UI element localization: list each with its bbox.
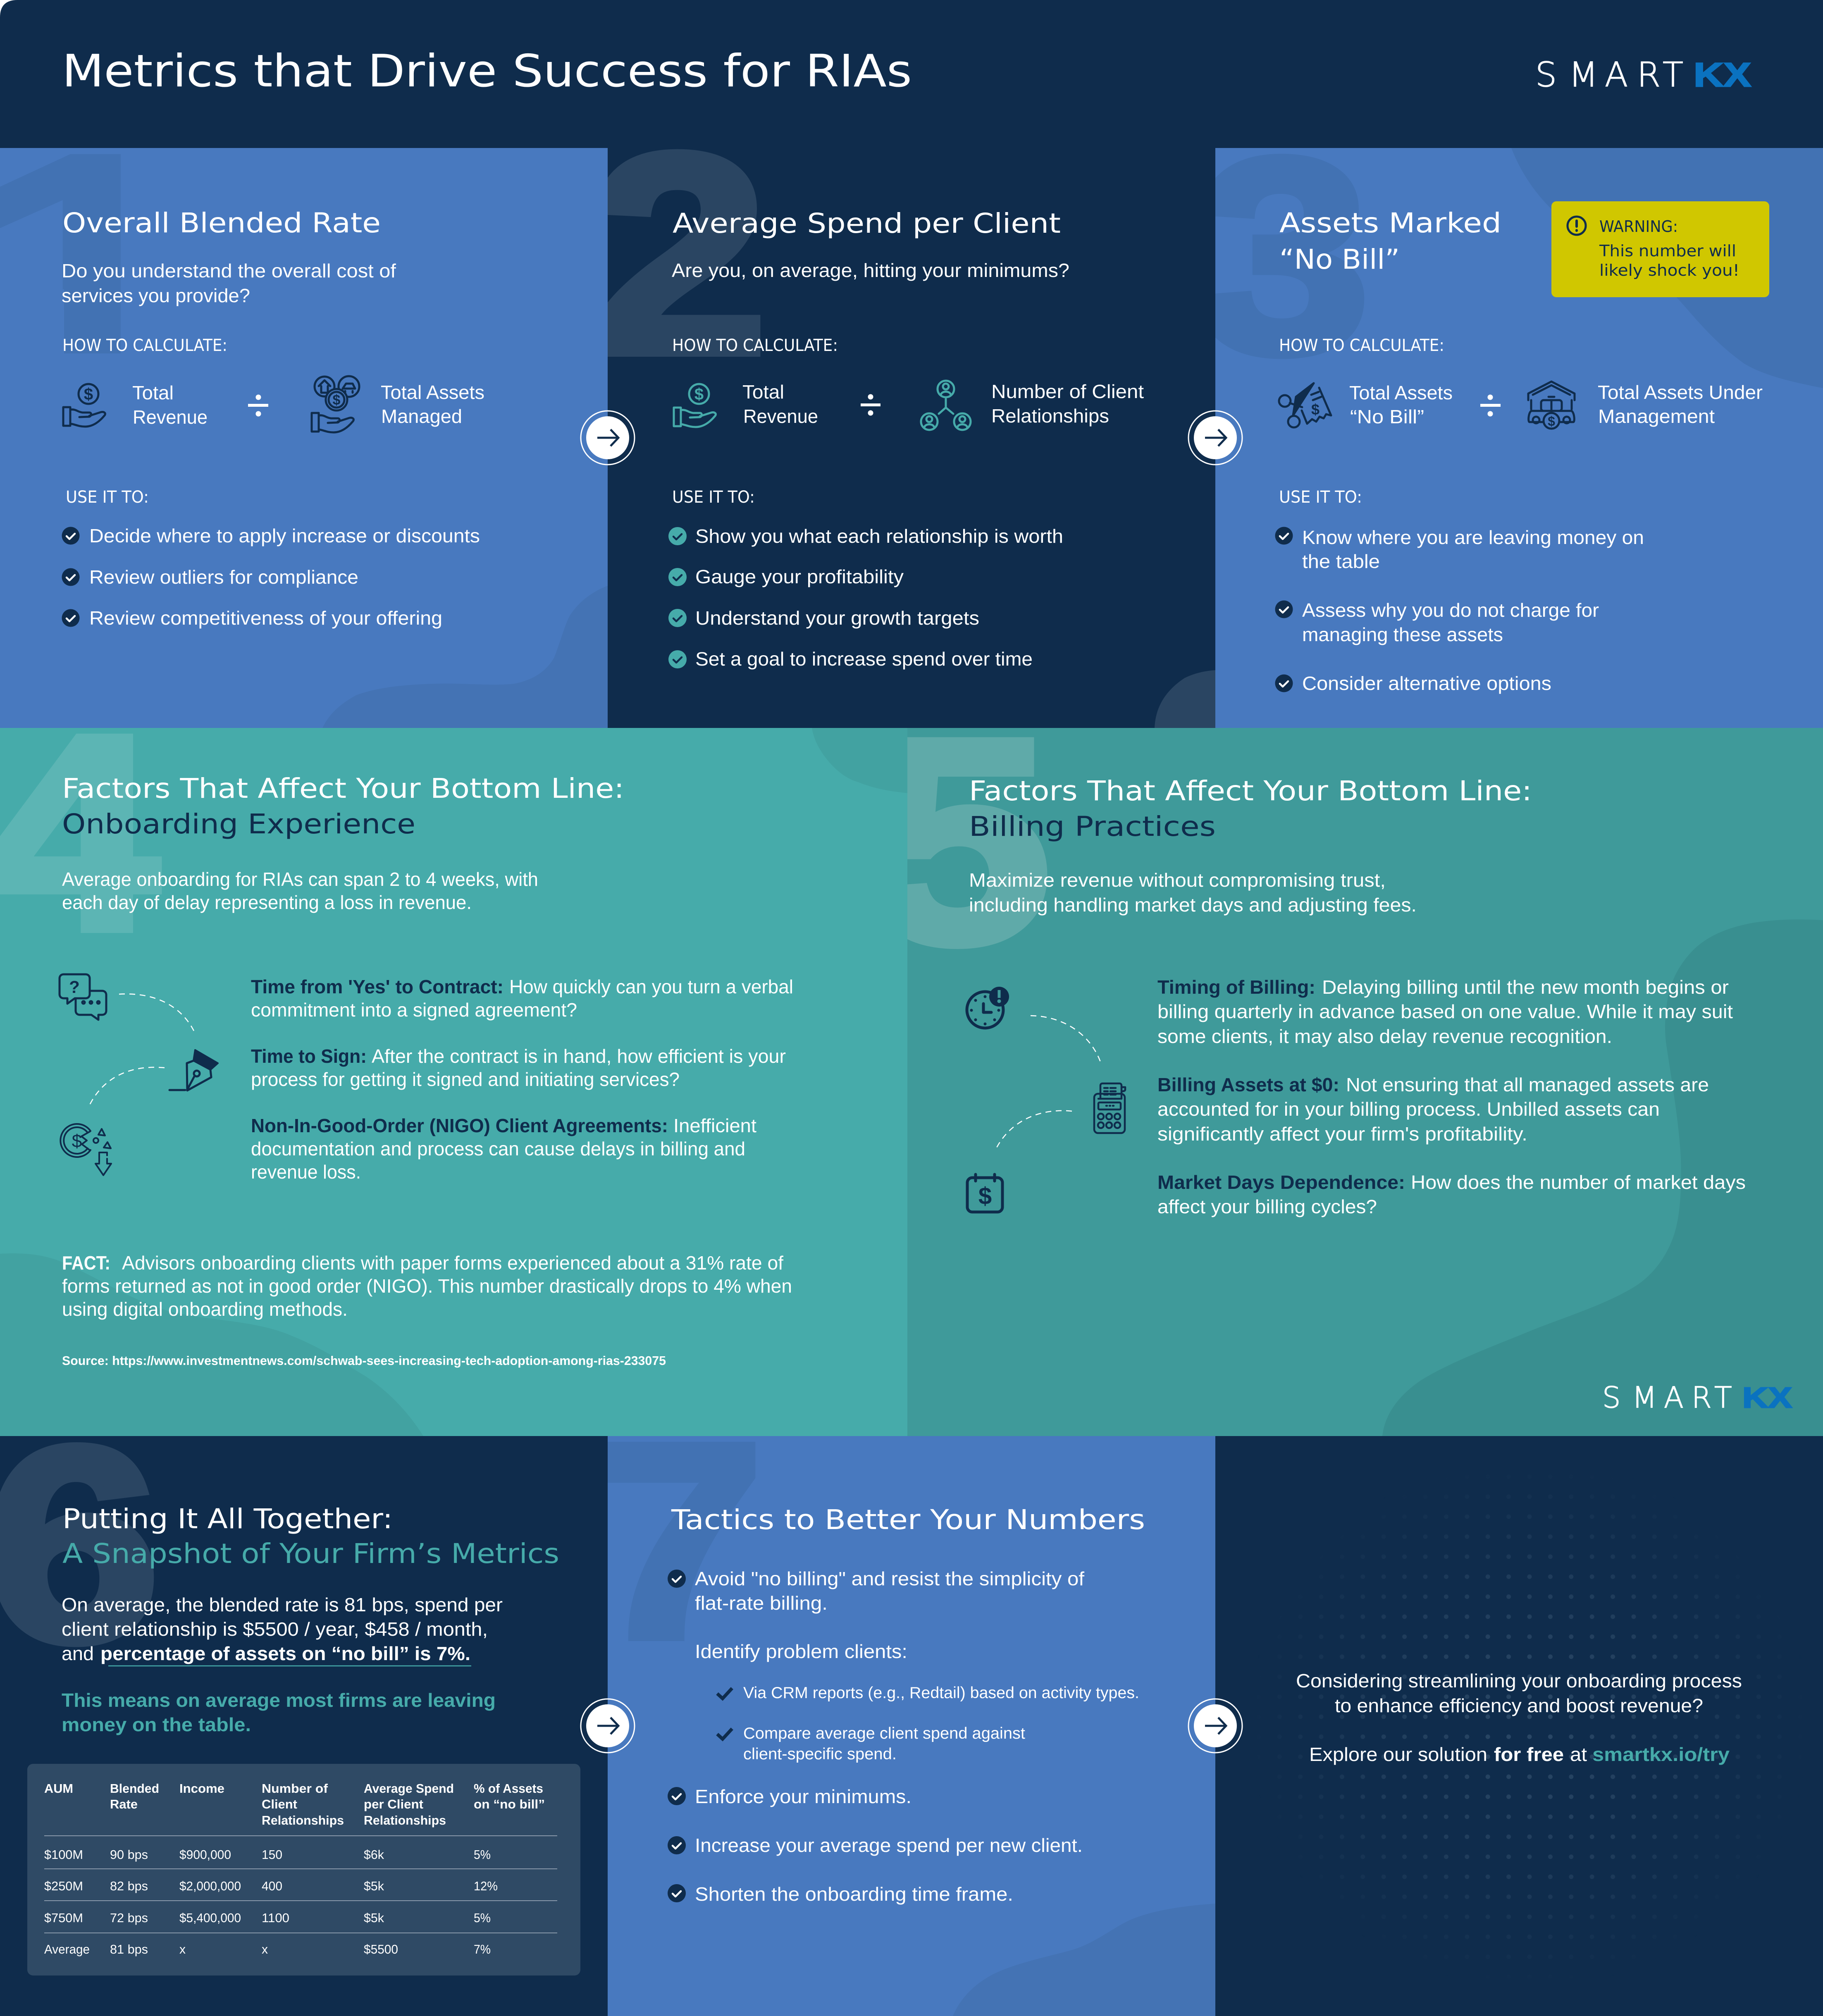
panel: 4 Onboarding Experience xyxy=(0,679,909,1436)
icon: chat bubbles: ? xyxy=(69,977,80,997)
icon: warning xyxy=(1568,217,1586,235)
table row: average xyxy=(44,1942,491,1956)
text block: billing factors: accounted for in your billing process. Unbilled assets can xyxy=(1157,1098,1660,1120)
icon: scissors cutting bill: $ xyxy=(1311,401,1320,418)
checklist: tactics: flat-rate billing. xyxy=(695,1592,828,1614)
checklist: Decide where to apply increase or discounts xyxy=(89,525,480,546)
text block: averages: On average, the blended rate is 81 bps, spend per xyxy=(62,1594,503,1615)
text: total assets under management xyxy=(1598,382,1763,427)
table header: AUM xyxy=(44,1781,73,1796)
icon: client relationships xyxy=(921,381,971,430)
heading: Factors That Affect Your Bottom Line: xyxy=(62,773,624,804)
checklist: managing these assets xyxy=(1302,624,1503,645)
table row: $100M: 150 xyxy=(262,1847,282,1862)
panel: 1 Overall Blended Rate xyxy=(0,100,608,728)
checklist: tactics: Increase your average spend per new client. xyxy=(695,1835,1083,1856)
icon: hand with coin xyxy=(63,384,105,427)
intro text xyxy=(969,869,1417,916)
heading: Billing Practices xyxy=(969,811,1216,842)
text block: onboarding factors: Time from 'Yes' to Contract: xyxy=(251,976,503,997)
checklist: tactics: Avoid "no billing" and resist the simplicity of xyxy=(695,1568,1084,1589)
heading xyxy=(969,775,1532,842)
heading: “No Bill” xyxy=(1279,243,1400,275)
icon: calendar with dollar xyxy=(967,1174,1002,1212)
text block: fact: FACT: xyxy=(62,1252,110,1274)
callout: leaving money on the table: money on the table. xyxy=(62,1714,251,1735)
checklist xyxy=(668,525,1063,670)
heading: Putting It All Together: xyxy=(62,1503,393,1535)
icon: hand with coin xyxy=(674,384,716,427)
label: use it to: USE IT TO: xyxy=(1279,488,1362,507)
text block: fact: forms returned as not in good order (NIGO). This number drastically drops to 4% when xyxy=(62,1275,792,1297)
intro text: including handling market days and adjusting fees. xyxy=(969,894,1417,916)
text block: averages: and xyxy=(62,1643,94,1664)
table header: on “no bill” xyxy=(474,1797,545,1811)
table row: $100M: $900,000 xyxy=(179,1847,231,1862)
heading xyxy=(1279,207,1501,275)
icon: clock with alert xyxy=(967,987,1009,1028)
logo: SmartKX header: KX xyxy=(1694,56,1751,94)
table row: $250M: $250M xyxy=(44,1879,83,1893)
checklist: Know where you are leaving money on xyxy=(1302,527,1644,548)
table row: average: x xyxy=(262,1942,268,1956)
icon: divide xyxy=(1480,394,1501,417)
table row: $100M: 90 bps xyxy=(110,1847,148,1862)
intro text xyxy=(62,868,538,913)
title: Metrics that Drive Success for RIAs xyxy=(62,45,912,97)
panel: 3 Assets Marked No Bill xyxy=(1215,148,1823,728)
text: total revenue: Total xyxy=(742,381,784,403)
text block: onboarding factors: After the contract is in hand, how efficient is your xyxy=(372,1045,786,1067)
heading: Factors That Affect Your Bottom Line: xyxy=(969,775,1532,807)
table header xyxy=(44,1781,545,1828)
text block: averages: percentage of assets on “no bill” is 7%. xyxy=(100,1643,470,1664)
text: total assets under management: Total Assets Under xyxy=(1598,382,1763,403)
intro text: services you provide? xyxy=(62,285,250,306)
icon: divide xyxy=(248,394,268,417)
source: Source: https://www.investmentnews.com/schwab-sees-increasing-tech-adoption-among-rias-233075 xyxy=(62,1353,666,1368)
checklist: the table xyxy=(1302,551,1380,572)
text: total revenue xyxy=(742,381,818,427)
checklist: tactics: Compare average client spend against xyxy=(743,1725,1025,1742)
icon: scissors cutting bill xyxy=(1279,383,1331,427)
checklist: Review competitiveness of your offering xyxy=(89,607,442,629)
text: total assets managed xyxy=(381,382,484,427)
panel: 7 Tactics to Better Your Numbers: 7 xyxy=(589,1387,764,1695)
table row: $750M: 72 bps xyxy=(110,1911,148,1925)
text: total revenue xyxy=(132,382,208,428)
table: firm metrics xyxy=(27,1764,580,1975)
icon: calendar with dollar: $ xyxy=(978,1183,992,1210)
text block: fact: using digital onboarding methods. xyxy=(62,1298,348,1320)
text block: fact xyxy=(62,1252,792,1320)
connector: chat to pen xyxy=(119,994,196,1034)
arrow: panel 1 to 2 xyxy=(581,411,635,465)
table header: % of Assets xyxy=(474,1781,543,1796)
text block: onboarding factors: Non-In-Good-Order (NIGO) Client Agreements: xyxy=(251,1115,668,1136)
icon: hand with coin: $ xyxy=(84,385,93,403)
checklist: Assess why you do not charge for xyxy=(1302,599,1599,621)
arrow: panel 7 to 8 xyxy=(1188,1699,1242,1753)
icon: divide xyxy=(861,394,880,416)
heading: A Snapshot of Your Firm’s Metrics xyxy=(62,1538,559,1570)
table row: $100M: 5% xyxy=(474,1847,491,1862)
text block: averages: client relationship is $5500 / year, $458 / month, xyxy=(62,1618,488,1640)
checklist: tactics: Shorten the onboarding time frame. xyxy=(695,1883,1013,1905)
checklist: tactics: Via CRM reports (e.g., Redtail) based on activity types. xyxy=(743,1684,1139,1702)
panel: 2 Average Spend per Client: 2 xyxy=(588,96,768,412)
callout: leaving money on the table: This means on average most firms are leaving xyxy=(62,1689,496,1711)
table header: Client xyxy=(262,1797,297,1811)
heading: Tactics to Better Your Numbers xyxy=(671,1504,1145,1536)
table row: $750M xyxy=(44,1911,491,1925)
text: total assets managed: Managed xyxy=(381,406,462,427)
table header: Relationships xyxy=(262,1813,344,1828)
intro text: each day of delay representing a loss in revenue. xyxy=(62,892,472,913)
intro text: Average onboarding for RIAs can span 2 to 4 weeks, with xyxy=(62,868,538,890)
checklist: Consider alternative options xyxy=(1302,673,1551,694)
panel: 5 Billing Practices: 5 xyxy=(867,680,1051,1003)
heading: Average Spend per Client xyxy=(673,208,1061,239)
text block: billing factors xyxy=(1157,976,1746,1217)
icon: hand with coin: $ xyxy=(694,385,704,403)
table header: Relationships xyxy=(364,1813,446,1828)
heading xyxy=(62,1503,559,1570)
checklist xyxy=(1275,527,1644,694)
text block: onboarding factors: documentation and process can cause delays in billing and xyxy=(251,1138,745,1159)
text block: billing factors: affect your billing cycles? xyxy=(1157,1196,1377,1217)
table header: Income xyxy=(179,1781,224,1796)
intro text: Do you understand the overall cost of xyxy=(62,260,396,282)
text block: onboarding factors: Time to Sign: xyxy=(251,1045,367,1067)
text block: onboarding factors: process for getting it signed and initiating services? xyxy=(251,1069,680,1090)
table row: $250M: 400 xyxy=(262,1879,282,1893)
text block: averages xyxy=(62,1594,503,1666)
text block: free trial link: at xyxy=(1570,1744,1587,1765)
table row: $250M: 82 bps xyxy=(110,1879,148,1893)
panel: 5 Billing Practices xyxy=(907,728,1823,1436)
callout: warning xyxy=(1551,201,1769,297)
text block: onboarding factors: commitment into a signed agreement? xyxy=(251,999,577,1021)
table row: $750M: 1100 xyxy=(262,1911,289,1925)
text block: free trial link: smartkx.io/try xyxy=(1592,1744,1730,1765)
text: number of client relationships: Relationships xyxy=(991,405,1109,427)
text: total assets no bill: “No Bill” xyxy=(1350,406,1424,427)
table row: average: x xyxy=(179,1942,186,1956)
text: total revenue: Total xyxy=(132,382,174,403)
checklist: tactics xyxy=(668,1568,1139,1905)
table row: average: 7% xyxy=(474,1942,491,1956)
table row: average: 81 bps xyxy=(110,1942,148,1956)
text: number of client relationships: Number of Client xyxy=(991,381,1144,402)
text block: billing factors: Delaying billing until the new month begins or xyxy=(1322,976,1729,998)
callout: warning: This number will xyxy=(1599,242,1736,260)
callout: leaving money on the table xyxy=(62,1689,496,1735)
table row: $750M: $750M xyxy=(44,1911,83,1925)
heading: Onboarding Experience xyxy=(62,808,415,840)
panel: 7 Tactics to Better Your Numbers xyxy=(589,1387,1215,2016)
text block: free trial link xyxy=(1309,1744,1730,1765)
icon: shrinking revenue xyxy=(60,1124,111,1175)
text: total revenue: Revenue xyxy=(133,406,208,428)
intro text: Maximize revenue without compromising trust, xyxy=(969,869,1386,891)
callout: warning: WARNING: xyxy=(1599,217,1678,236)
text block: billing factors: significantly affect your firm's profitability. xyxy=(1157,1123,1527,1145)
table header: Rate xyxy=(110,1797,138,1811)
icon: hand with asset coins: $ xyxy=(333,392,341,408)
table row: $750M: 5% xyxy=(474,1911,491,1925)
table row: $750M: $5,400,000 xyxy=(179,1911,241,1925)
text block: onboarding factors: How quickly can you turn a verbal xyxy=(509,976,793,997)
table row: $250M xyxy=(44,1879,498,1893)
text block: free trial link: Explore our solution xyxy=(1309,1744,1487,1765)
table row: $100M: $100M xyxy=(44,1847,83,1862)
panel: 8 call to action xyxy=(1215,1436,1823,2016)
checklist xyxy=(62,525,480,629)
checklist: tactics: client-specific spend. xyxy=(743,1745,897,1763)
logo: SmartKX footer xyxy=(1602,1381,1792,1415)
panel: 2 Average Spend per Client xyxy=(608,148,1215,728)
text block: onboarding factors xyxy=(251,976,793,1183)
text block: billing factors: billing quarterly in advance based on one value. While it may suit xyxy=(1157,1001,1733,1022)
checklist: Set a goal to increase spend over time xyxy=(695,648,1033,670)
checklist: Show you what each relationship is worth xyxy=(695,525,1063,547)
checklist: Review outliers for compliance xyxy=(89,566,358,588)
connector: calculator to calendar xyxy=(995,1111,1072,1151)
label: use it to: USE IT TO: xyxy=(66,488,149,507)
label: how to calculate: HOW TO CALCULATE: xyxy=(672,336,838,355)
icon: chat bubbles xyxy=(60,974,106,1020)
connector: pen to coin xyxy=(88,1067,165,1108)
text block: question: Considering streamlining your onboarding process xyxy=(1296,1670,1742,1692)
label: how to calculate: HOW TO CALCULATE: xyxy=(1279,336,1444,355)
icon: shrinking revenue: $ xyxy=(72,1131,82,1151)
text: total assets under management: Management xyxy=(1598,406,1715,427)
logo: SmartKX footer: SMART xyxy=(1602,1381,1732,1415)
text: total assets managed: Total Assets xyxy=(381,382,484,403)
text block: billing factors: How does the number of market days xyxy=(1411,1171,1746,1193)
logo: SmartKX header xyxy=(1535,55,1751,95)
text block: onboarding factors: Inefficient xyxy=(673,1115,756,1136)
text block: free trial link: for free xyxy=(1494,1744,1564,1765)
text block: billing factors: Market Days Dependence: xyxy=(1157,1171,1405,1193)
text block: billing factors: Not ensuring that all managed assets are xyxy=(1346,1074,1709,1095)
text block: fact: Advisors onboarding clients with paper forms experienced about a 31% rate of xyxy=(122,1252,783,1274)
checklist: tactics: Identify problem clients: xyxy=(695,1641,907,1662)
table header: Average Spend xyxy=(364,1781,454,1796)
text: total revenue: Revenue xyxy=(743,406,818,427)
text block: billing factors: Timing of Billing: xyxy=(1157,976,1315,998)
table row: $250M: 12% xyxy=(474,1879,498,1893)
heading xyxy=(62,773,624,840)
panel: 6 Putting It All Together xyxy=(0,1391,608,2016)
text block: billing factors: some clients, it may also delay revenue recognition. xyxy=(1157,1026,1612,1047)
table row: average: Average xyxy=(44,1942,90,1956)
arrow: panel 6 to 7 xyxy=(581,1699,635,1753)
icon: car and garage with coin: $ xyxy=(1548,414,1555,429)
logo: SmartKX header: SMART xyxy=(1535,55,1683,95)
text block: question: to enhance efficiency and boost revenue? xyxy=(1335,1695,1703,1716)
panel: 3 Assets Marked No Bill: 3 xyxy=(1195,102,1370,410)
table row: $250M: $5k xyxy=(364,1879,384,1893)
text block: question xyxy=(1296,1670,1742,1716)
icon: billing calculator xyxy=(1094,1083,1125,1133)
checklist: tactics: Enforce your minimums. xyxy=(695,1786,912,1807)
icon: car and garage with coin xyxy=(1528,382,1575,429)
table row: $750M: $5k xyxy=(364,1911,384,1925)
table row: $100M xyxy=(44,1847,491,1862)
icon: hand with asset coins xyxy=(312,376,359,432)
text: number of client relationships xyxy=(991,381,1144,427)
connector: clock to calculator xyxy=(1031,1016,1102,1065)
text block: onboarding factors: revenue loss. xyxy=(251,1161,361,1183)
label: use it to: USE IT TO: xyxy=(672,488,755,507)
table header: Number of xyxy=(262,1781,328,1796)
heading: Overall Blended Rate xyxy=(62,207,381,239)
checklist: Understand your growth targets xyxy=(695,607,979,629)
callout: warning: likely shock you! xyxy=(1599,261,1739,279)
header band xyxy=(0,0,1823,148)
arrow: panel 2 to 3 xyxy=(1188,411,1242,465)
table header: per Client xyxy=(364,1797,423,1811)
heading: Assets Marked xyxy=(1279,207,1501,239)
intro text xyxy=(62,260,396,306)
checklist: Gauge your profitability xyxy=(695,566,904,587)
text: total assets no bill: Total Assets xyxy=(1349,382,1453,403)
logo: SmartKX footer: KX xyxy=(1742,1381,1792,1414)
text block: billing factors: Billing Assets at $0: xyxy=(1157,1074,1339,1095)
intro text: Are you, on average, hitting your minimums? xyxy=(672,260,1069,281)
icon: fountain pen xyxy=(169,1050,218,1090)
label: how to calculate: HOW TO CALCULATE: xyxy=(62,336,227,355)
table row: average: $5500 xyxy=(364,1942,398,1956)
table row: $250M: $2,000,000 xyxy=(179,1879,241,1893)
text: total assets no bill xyxy=(1349,382,1453,427)
table header: Blended xyxy=(110,1781,159,1796)
table row: $100M: $6k xyxy=(364,1847,384,1862)
